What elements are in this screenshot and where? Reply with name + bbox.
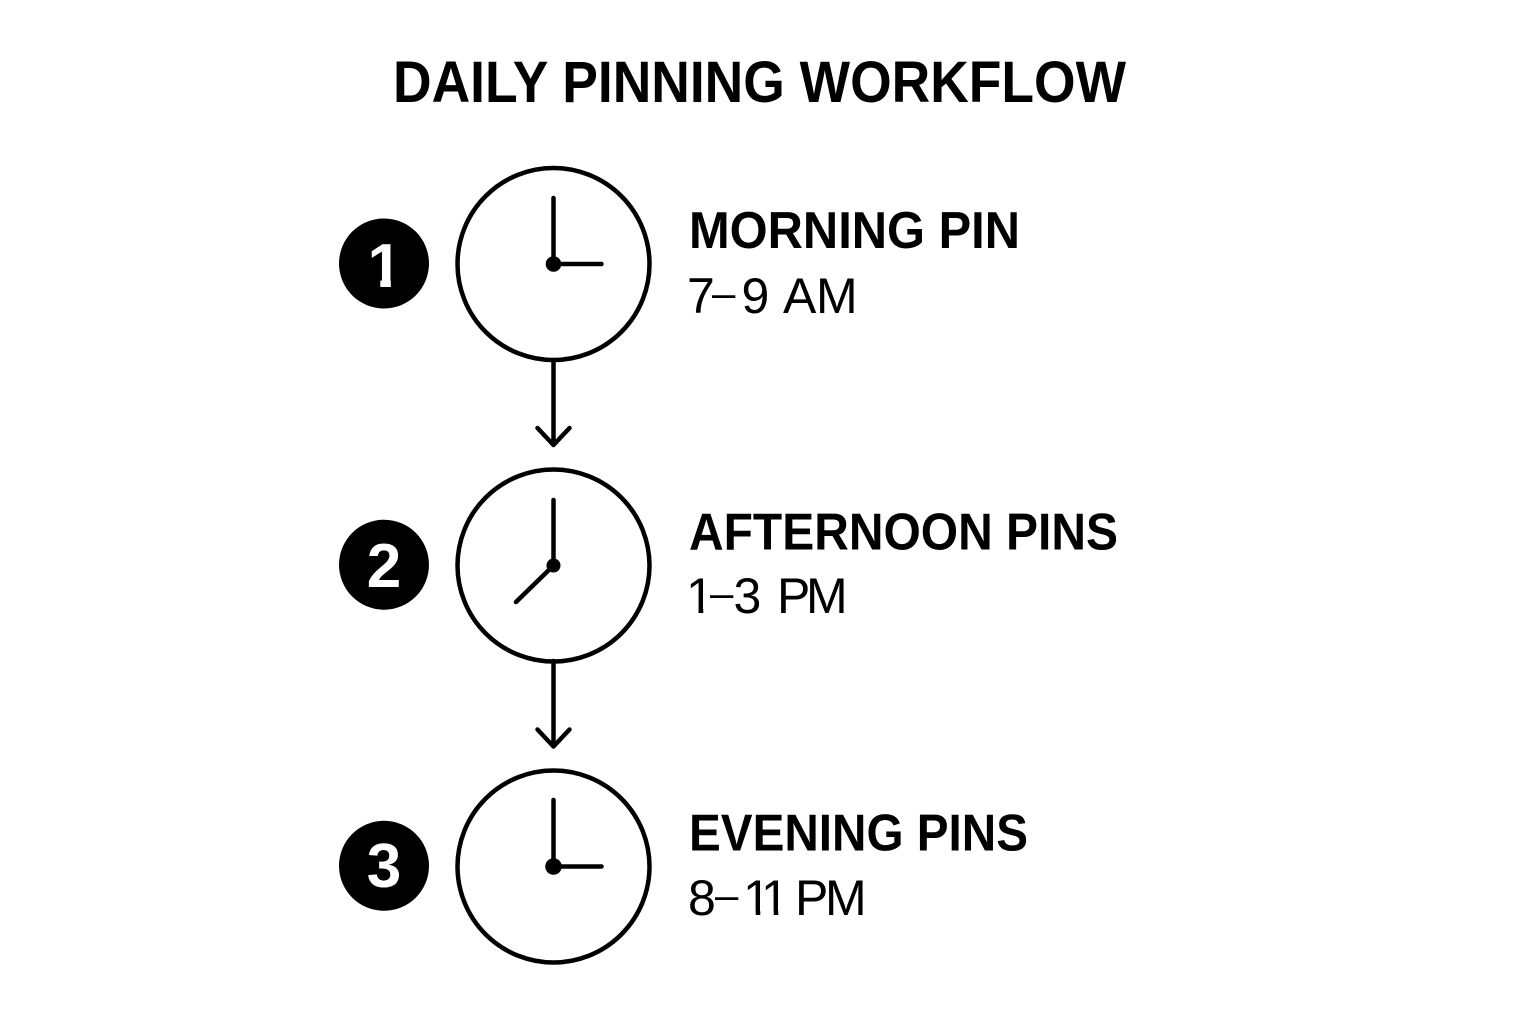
step 1 time: 9 [742, 268, 783, 324]
step 3 time: 1 [743, 870, 771, 926]
arrow: step 1 to step 2 [538, 360, 570, 445]
step 2 time [686, 568, 848, 624]
step 1 time: – [712, 269, 736, 316]
step 2 label: AFTERNOON PINS [689, 504, 1118, 562]
step 2 time: M [806, 568, 848, 624]
step 3 label: EVENING PINS [689, 804, 1028, 862]
step 3 time: P [795, 870, 828, 926]
step 1 time: 7 [687, 268, 715, 324]
number badge 3: 3 [367, 832, 401, 901]
step 2 time: P [777, 568, 810, 624]
step 3 time: M [825, 870, 867, 926]
step 3 time: 8 [688, 870, 716, 926]
step 1 label: MORNING PIN [689, 202, 1020, 260]
step 2 time: – [710, 569, 734, 616]
number badge 2 [339, 520, 429, 610]
number badge 3 [339, 821, 429, 911]
number badge 1 [339, 218, 429, 308]
step 3 time: – [715, 871, 739, 918]
step 2 time: 3 [734, 568, 775, 624]
step 3 time [688, 870, 867, 926]
icon: clock 1 [458, 168, 650, 360]
arrow: step 2 to step 3 [538, 661, 570, 746]
icon: clock 3 [458, 770, 650, 962]
number badge 1: 1 [368, 232, 402, 301]
title: DAILY PINNING WORKFLOW [393, 50, 1126, 115]
step 2 time: 1 [686, 568, 714, 624]
step 1 time: M [816, 268, 858, 324]
step 1 [339, 168, 1020, 360]
step 1 time: A [783, 268, 817, 324]
icon: clock 2 [458, 470, 650, 662]
step 3 [339, 770, 1028, 962]
step 2 [339, 470, 1118, 662]
step 3 time: 1 [761, 870, 803, 926]
number badge 2: 2 [367, 532, 401, 601]
